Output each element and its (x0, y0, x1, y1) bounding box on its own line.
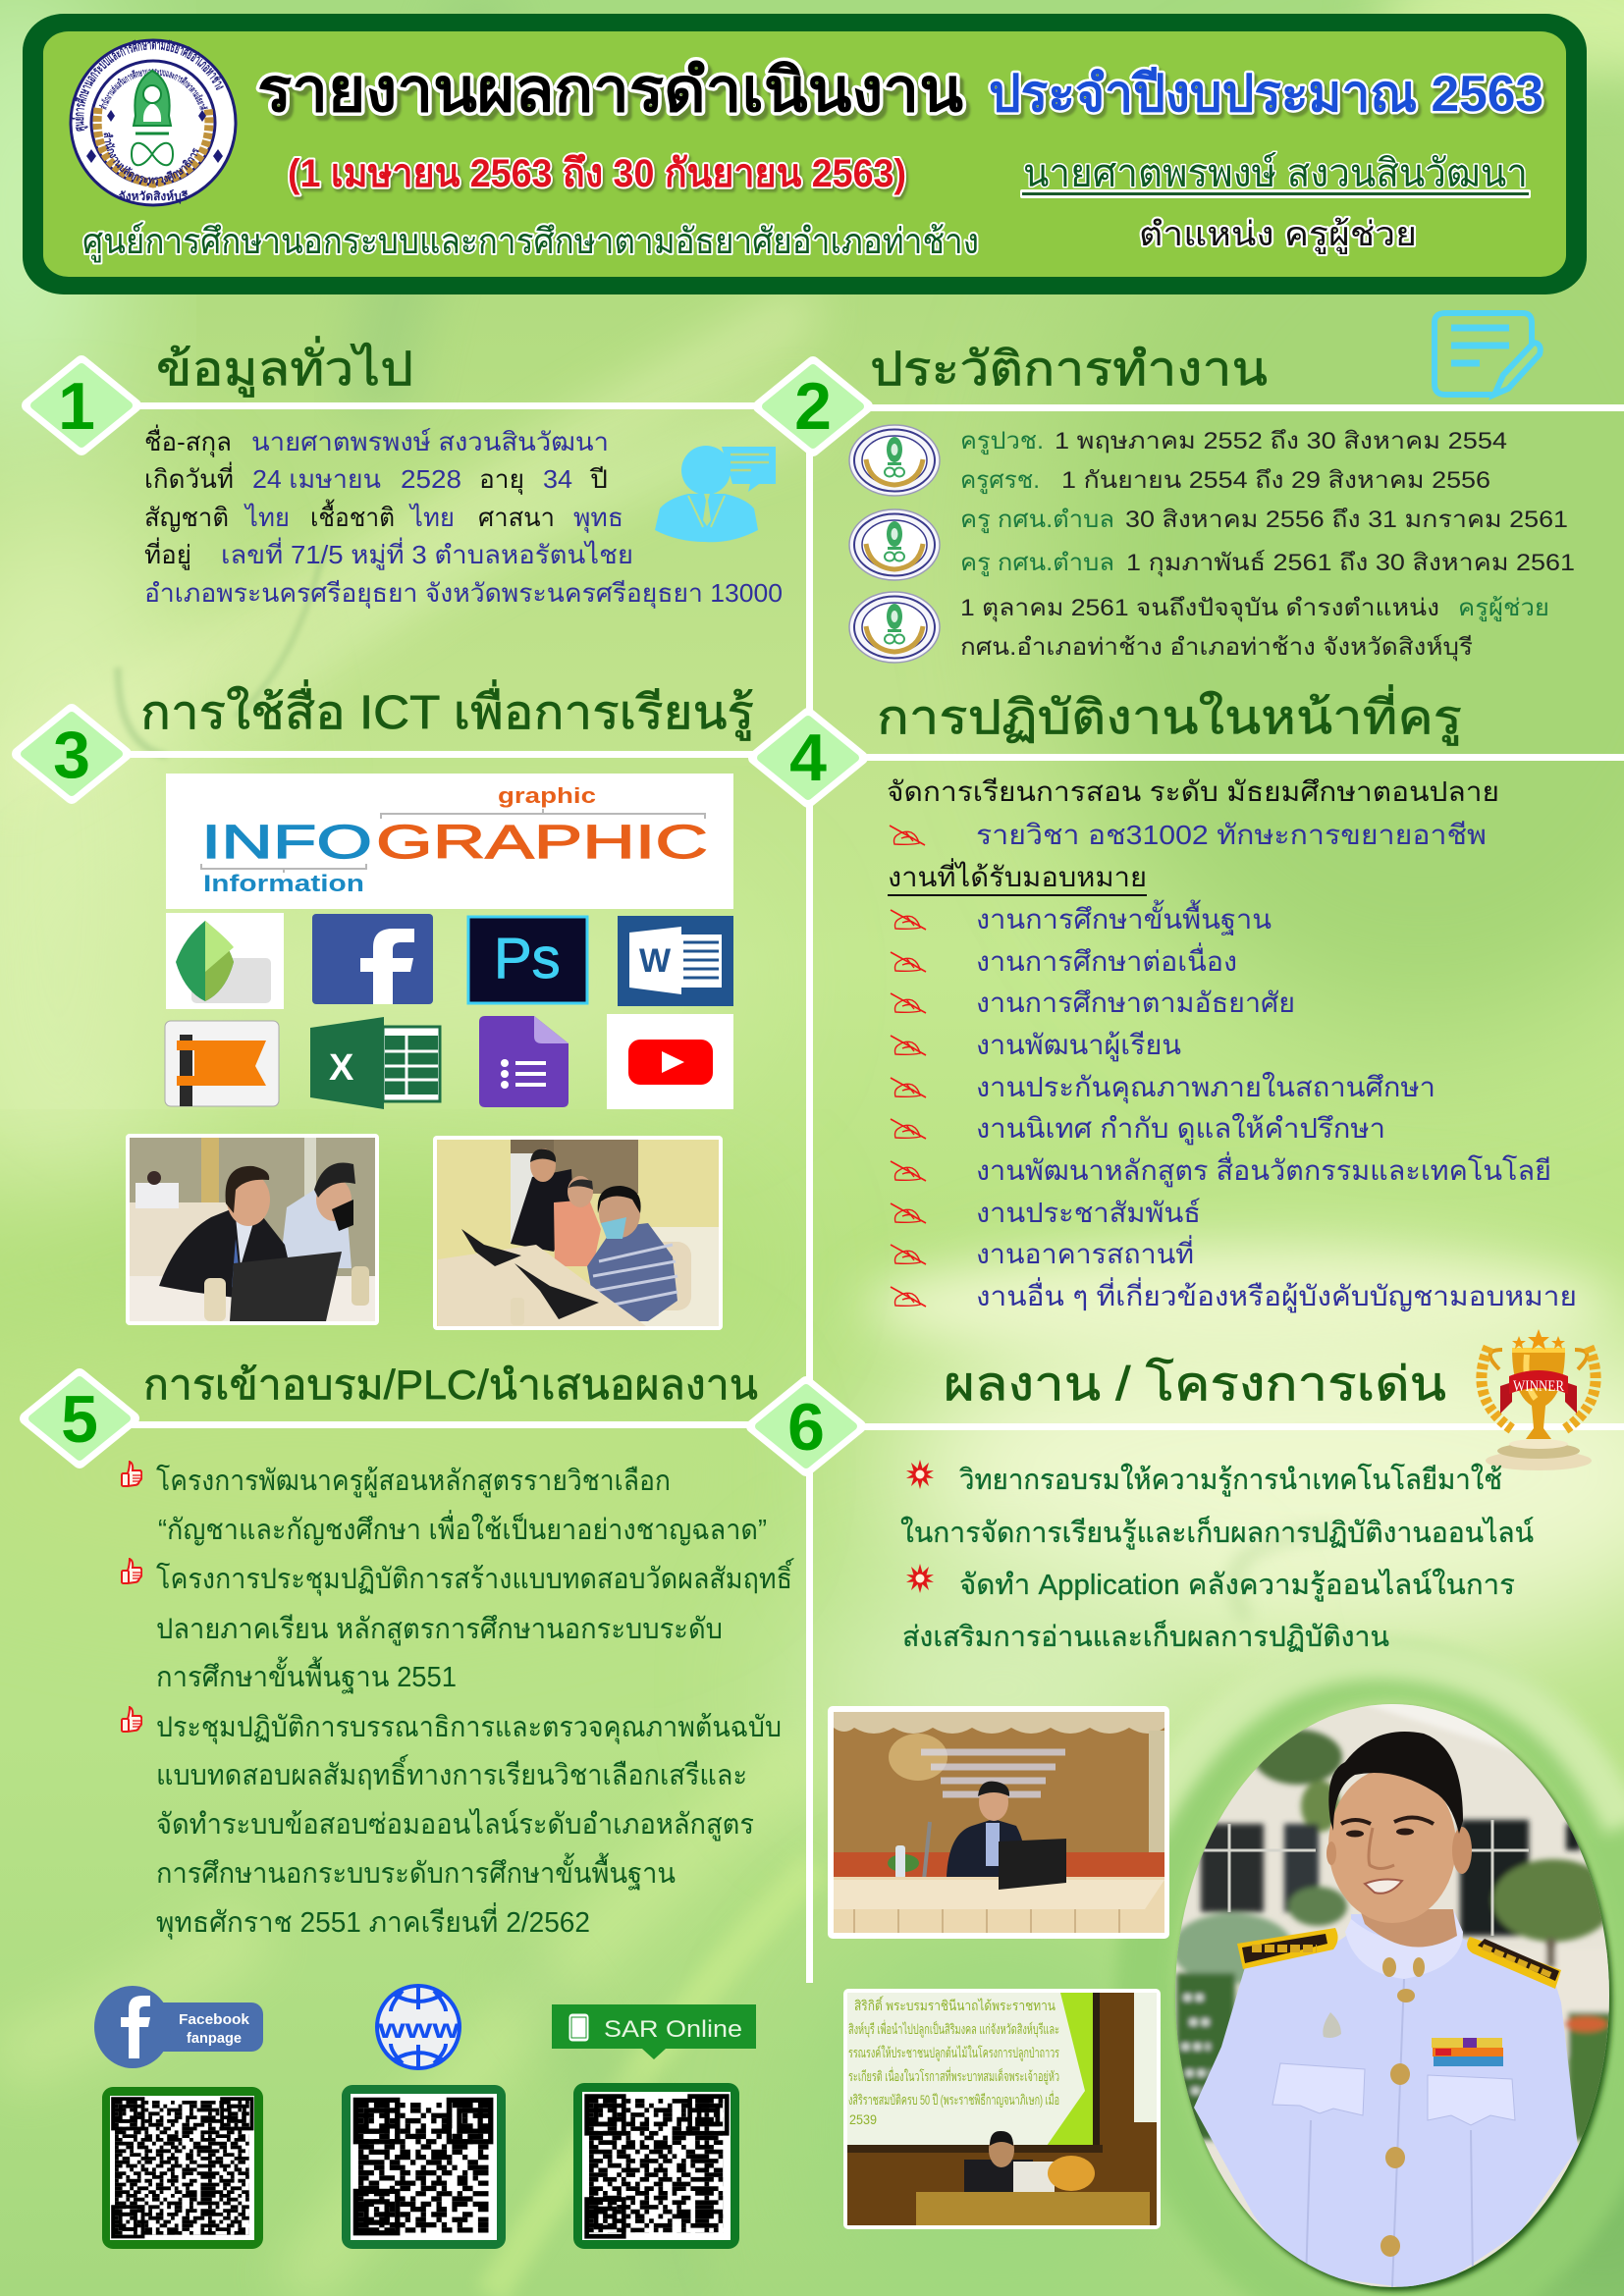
text block: career timeline: ครู กศน.ตำบล (960, 507, 1114, 534)
text block: training list: พุทธศักราช 2551 ภาคเรียนที่ 2/2562 (156, 1902, 590, 1940)
icon: www globe: www (377, 2013, 460, 2044)
badge: section 2 (760, 363, 866, 450)
icon: seal 1 (849, 425, 940, 496)
list: assigned duties: งานอื่น ๆ ที่เกี่ยวข้องหรือผู้บังคับบัญชามอบหมาย (976, 1277, 1577, 1313)
icon: SAR Online tag (552, 2004, 756, 2059)
list: assigned duties: งานประชาสัมพันธ์ (976, 1198, 1201, 1228)
logo: centre seal: ศูนย์การศึกษานอกระบบและการศึกษาตามอัธยาศัยอำเภอท่าช้าง (73, 39, 224, 132)
icon: Word: W (639, 942, 672, 980)
QR code: website (342, 2085, 506, 2249)
icon: crossed pen (890, 826, 925, 845)
text block: highlights: ส่งเสริมการอ่านและเก็บผลการปฏิบัติงาน (902, 1619, 1389, 1653)
icon: thumb 3 (122, 1707, 141, 1732)
list: assigned duties: งานประกันคุณภาพภายในสถานศึกษา (976, 1071, 1435, 1104)
subheading: assigned work: งานที่ได้รับมอบหมาย (888, 858, 1147, 892)
text block: career timeline: 1 พฤษภาคม 2552 ถึง 30 สิงหาคม 2554 (1055, 428, 1507, 454)
photo: speaker on stage with slide: รรณรงค์ให้ประชาชนปลูกต้นไม้ในโครงการปลูกป่าถาวร (848, 2045, 1059, 2061)
text block: personal data: ไทย (408, 503, 455, 532)
photo: speaker on stage with slide (843, 1989, 1161, 2229)
heading: การใช้สื่อ ICT เพื่อการเรียนรู้ (140, 679, 754, 741)
list: assigned duties: งานพัฒนาหลักสูตร สื่อนวัตกรรมและเทคโนโลยี (976, 1151, 1551, 1188)
logo: infographic banner: Information (203, 871, 364, 897)
badge: section 6 (753, 1383, 859, 1469)
icon: star 1 (906, 1460, 934, 1489)
logo: centre seal: สำนักงานปลัดกระทรวงศึกษาธิการ (104, 132, 199, 185)
icon: seal 2 (849, 509, 940, 580)
text block: personal data: ปี (589, 464, 608, 494)
panel: ICT media (126, 679, 754, 1330)
icon: Google Forms (479, 1016, 568, 1107)
list: assigned duties: งานพัฒนาผู้เรียน (976, 1030, 1181, 1062)
panel: header banner (23, 14, 1587, 294)
logo: infographic banner (166, 774, 733, 909)
text block: personal data: เชื้อชาติ (310, 499, 395, 532)
text block: personal data: พุทธ (573, 503, 623, 533)
text block: highlights: จัดทำ Application คลังความรู้ออนไลน์ในการ (959, 1568, 1515, 1602)
text block: highlights: ในการจัดการเรียนรู้และเก็บผลการปฏิบัติงานออนไลน์ (900, 1515, 1534, 1550)
photo: speaker on stage with slide: สิริกิติ์ พระบรมราชินีนาถได้พระราชทาน (854, 1996, 1056, 2013)
icon: winner trophy (1482, 1329, 1596, 1470)
icon: thumb 2 (122, 1559, 141, 1583)
panel: general information (144, 336, 783, 609)
icon: Facebook (312, 914, 433, 1004)
icon: person with speech bubble (655, 446, 776, 542)
list: assigned duties: งานการศึกษาตามอัธยาศัย (976, 988, 1295, 1018)
badge: section 3: 3 (53, 718, 90, 792)
icon: Photoshop: Ps (494, 927, 561, 990)
text block: personal data: เลขที่ 71/5 หมู่ที่ 3 ตำบลหอรัตนไชย (221, 537, 633, 570)
list: assigned duties: งานการศึกษาขั้นพื้นฐาน (976, 899, 1272, 935)
icon: Word (618, 916, 733, 1006)
text block: highlights (900, 1463, 1534, 1653)
text block: personal data (144, 424, 783, 609)
photo: teacher at laptop training (126, 1134, 379, 1325)
text block: career timeline: 1 กันยายน 2554 ถึง 29 สิงหาคม 2556 (1061, 467, 1490, 494)
panel: links and QR codes (94, 1986, 756, 2249)
list: assigned duties: งานนิเทศ กำกับ ดูแลให้คำปรึกษา (976, 1112, 1385, 1146)
text block: training list: การศึกษานอกระบบระดับการศึกษาขั้นพื้นฐาน (156, 1852, 676, 1891)
icon: Google Pages flag (165, 1021, 279, 1106)
logo: infographic banner: INFO (201, 817, 372, 869)
icon: thumb 1 (122, 1462, 141, 1486)
text block: career timeline: ครู กศน.ตำบล (960, 550, 1114, 577)
icon: Excel: X (329, 1047, 354, 1089)
text block: career timeline: 1 ตุลาคม 2561 จนถึงปัจจุบัน ดำรงตำแหน่ง (960, 595, 1439, 622)
photo: speaker on stage with slide: งสิริราชสมบัติครบ 50 ปี (พระราชพิธีกาญจนาภิเษก) เมื่อ (848, 2091, 1059, 2108)
icon: star 2 (906, 1564, 934, 1593)
icon: YouTube (607, 1014, 733, 1109)
photo: coaching at laptops (433, 1136, 723, 1330)
panel: work history (849, 313, 1575, 663)
text block: personal data: เกิดวันที่ (144, 461, 234, 494)
text block: personal data: 34 (543, 464, 572, 494)
badge: section 1 (28, 362, 135, 449)
text block: personal data: อำเภอพระนครศรีอยุธยา จังหวัดพระนครศรีอยุธยา 13000 (144, 578, 783, 609)
badge: section 5 (27, 1375, 133, 1462)
heading: การปฏิบัติงานในหน้าที่ครู (877, 684, 1462, 746)
photo: portrait in oval frame (1168, 1698, 1620, 2296)
icon: Facebook fanpage badge (94, 1986, 263, 2068)
icon: www globe (377, 1986, 460, 2068)
subtitle: fiscal year: ประจำปีงบประมาณ 2563 (989, 66, 1543, 123)
QR code: Facebook (102, 2087, 263, 2249)
photo: speaker at table (828, 1706, 1169, 1939)
icon: Excel (310, 1017, 440, 1109)
logo: centre seal (69, 39, 238, 206)
badge: section 5: 5 (61, 1382, 98, 1457)
position: ตำแหน่ง ครูผู้ช่วย (1139, 216, 1417, 254)
heading: ผลงาน / โครงการเด่น (944, 1357, 1446, 1411)
logo: infographic banner: GRAPHIC (376, 817, 708, 869)
list: assigned duties (891, 899, 1577, 1313)
text: teaching level: จัดการเรียนการสอน ระดับ มัธยมศึกษาตอนปลาย (887, 776, 1499, 807)
text block: personal data: อายุ (479, 464, 524, 495)
text block: training list: การศึกษาขั้นพื้นฐาน 2551 (156, 1656, 457, 1694)
text block: training list: จัดทำระบบข้อสอบซ่อมออนไลน์ระดับอำเภอหลักสูตร (156, 1807, 754, 1842)
text block: personal data: นายศาตพรพงษ์ สงวนสินวัฒนา (251, 427, 609, 456)
divider: section lines (72, 402, 1624, 1983)
logo: infographic banner: graphic (498, 783, 596, 808)
icon: Facebook fanpage badge: Facebook (179, 2011, 250, 2028)
text block: highlights: วิทยากรอบรมให้ความรู้การนำเทคโนโลยีมาใช้ (959, 1463, 1502, 1497)
badge: section 4: 4 (789, 721, 827, 795)
text block: personal data: ที่อยู่ (144, 537, 191, 570)
text block: training list: ประชุมปฏิบัติการบรรณาธิการและตรวจคุณภาพต้นฉบับ (156, 1712, 782, 1744)
text block: career timeline: ครูปวช. (960, 428, 1044, 455)
icon: Snapseed (166, 913, 284, 1009)
text block: personal data: ไทย (244, 503, 290, 532)
panel: training and PLC (122, 1362, 794, 1940)
text block: career timeline: 1 กุมภาพันธ์ 2561 ถึง 30 สิงหาคม 2561 (1126, 549, 1575, 577)
icon: seal 3 (849, 592, 940, 663)
list: assigned duties: งานอาคารสถานที่ (976, 1235, 1194, 1269)
centre name: ศูนย์การศึกษานอกระบบและการศึกษาตามอัธยาศัยอำเภอท่าช้าง (82, 221, 979, 263)
photo: speaker on stage with slide: ระเกียรติ เนื่องในวโรกาสที่พระบาทสมเด็จพระเจ้าอยู่หัว (848, 2067, 1059, 2085)
text: subject: รายวิชา อช31002 ทักษะการขยายอาชีพ (976, 820, 1487, 850)
text block: training list: ปลายภาคเรียน หลักสูตรการศึกษานอกระบบระดับ (156, 1614, 723, 1646)
text block: career timeline: ครูศรช. (960, 467, 1040, 495)
icon: SAR Online tag: SAR Online (604, 2016, 742, 2043)
panel: job duties (877, 684, 1577, 1313)
panel: outstanding work (828, 1329, 1620, 2296)
text block: training list: โครงการพัฒนาครูผู้สอนหลักสูตรรายวิชาเลือก (156, 1464, 671, 1498)
heading: ข้อมูลทั่วไป (156, 336, 413, 398)
badge: section 1: 1 (58, 369, 95, 444)
icon: winner trophy: WINNER (1513, 1378, 1564, 1395)
text block: career timeline (960, 428, 1575, 662)
text block: personal data: สัญชาติ (144, 503, 229, 532)
text block: training list: แบบทดสอบผลสัมฤทธิ์ทางการเรียนวิชาเลือกเสรีและ (156, 1754, 747, 1791)
teacher name: นายศาตพรพงษ์ สงวนสินวัฒนา (1023, 151, 1528, 195)
QR code: SAR Online (573, 2083, 739, 2249)
title: รายงานผลการดำเนินงาน (257, 57, 963, 125)
badge: section 6: 6 (787, 1390, 825, 1465)
text block: personal data: 2528 (401, 464, 461, 494)
badge: section 4 (755, 715, 861, 801)
text block: training list: โครงการประชุมปฏิบัติการสร้างแบบทดสอบวัดผลสัมฤทธิ์ (156, 1558, 794, 1596)
photo: speaker on stage with slide: สิงห์บุรี เพื่อนำไปปลูกเป็นสิริมงคล แก่จังหวัดสิงห์บุรีและ (848, 2020, 1059, 2038)
date range: (1 เมษายน 2563 ถึง 30 กันยายน 2563) (288, 152, 906, 195)
text block: personal data: ชื่อ-สกุล (144, 424, 232, 457)
text block: personal data: ศาสนา (478, 503, 555, 532)
icon: Facebook fanpage badge: fanpage (187, 2030, 242, 2047)
icon: document and pencil (1435, 313, 1541, 395)
text block: career timeline: ครูผู้ช่วย (1458, 595, 1549, 622)
logo: centre seal: จังหวัดสิงห์บุรี (119, 189, 189, 204)
text block: career timeline: 30 สิงหาคม 2556 ถึง 31 มกราคม 2561 (1125, 507, 1568, 533)
text block: training list: “กัญชาและกัญชงศึกษา เพื่อใช้เป็นยาอย่างชาญฉลาด” (158, 1510, 767, 1546)
text block: personal data: 24 เมษายน (252, 464, 381, 494)
icon: Photoshop (468, 917, 587, 1003)
photo: speaker on stage with slide: 2539 (849, 2111, 877, 2127)
heading: การเข้าอบรม/PLC/นำเสนอผลงาน (143, 1362, 758, 1408)
list: assigned duties: งานการศึกษาต่อเนื่อง (976, 942, 1237, 977)
badge: section 3 (19, 711, 125, 797)
heading: ประวัติการทำงาน (870, 344, 1268, 396)
text block: career timeline: กศน.อำเภอท่าช้าง อำเภอท่าช้าง จังหวัดสิงห์บุรี (960, 633, 1473, 662)
badge: section 2: 2 (794, 369, 832, 444)
text block: training list (156, 1464, 794, 1940)
